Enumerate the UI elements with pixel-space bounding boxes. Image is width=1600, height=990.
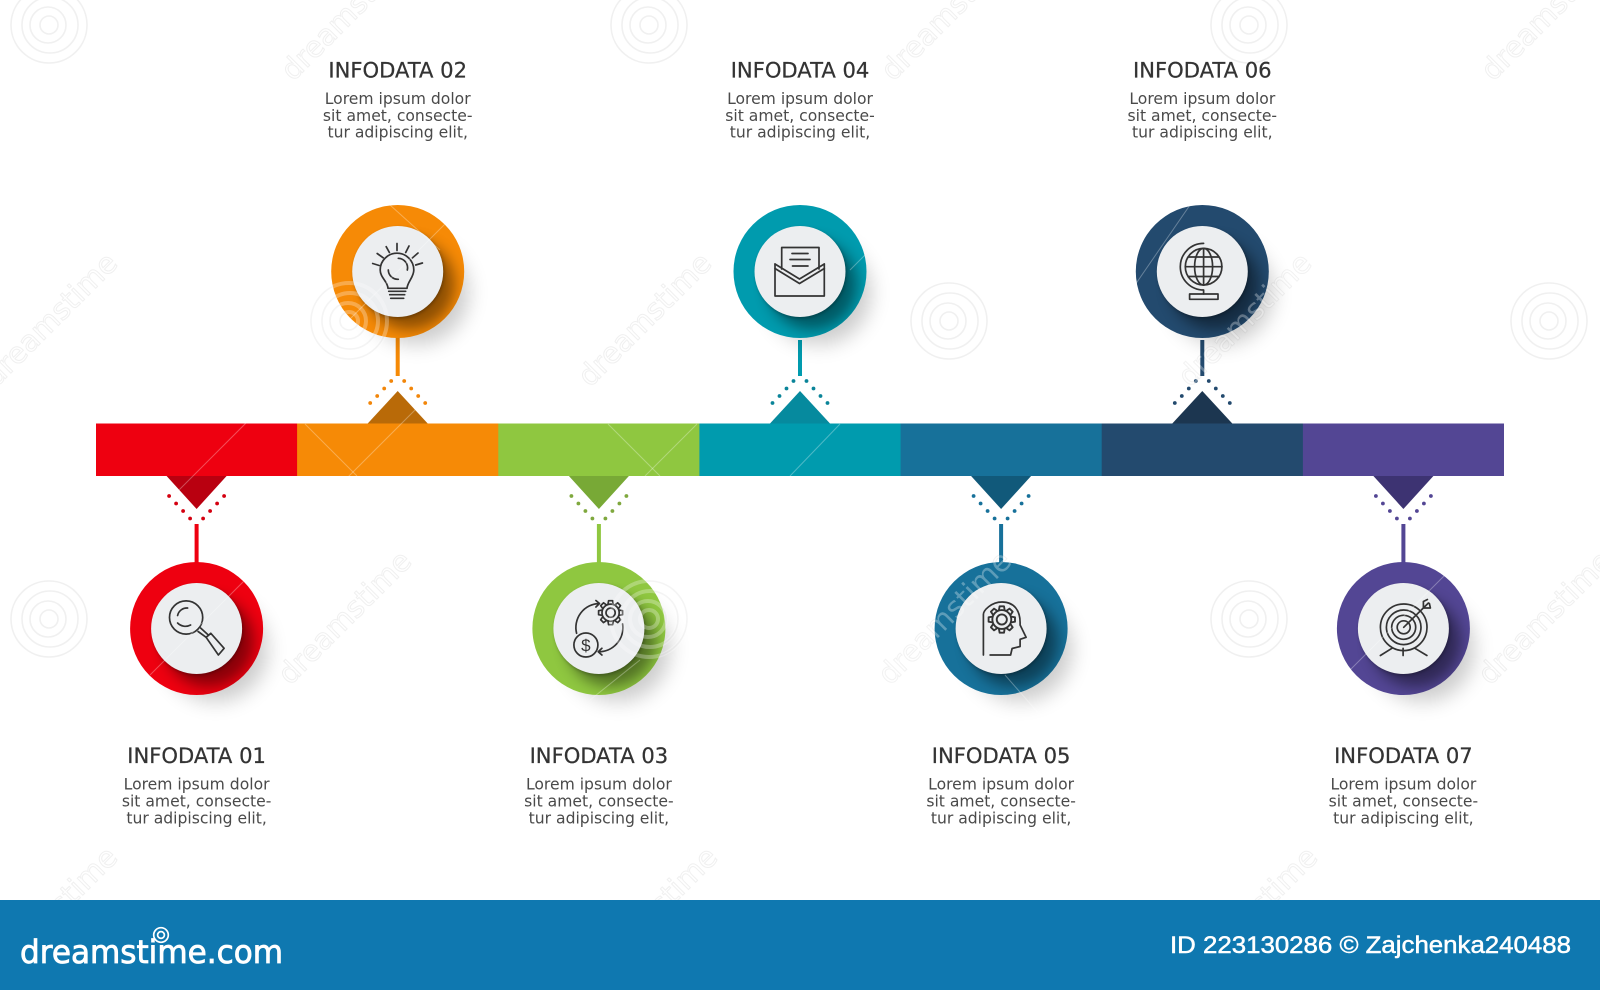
label 04: sit amet, consecte- <box>725 107 875 125</box>
connector: pointer, dots and stem <box>167 476 227 564</box>
label 03: Lorem ipsum dolor <box>526 776 672 794</box>
step 06 <box>1128 57 1277 424</box>
label 02 <box>323 57 472 142</box>
label 05: sit amet, consecte- <box>926 792 1076 810</box>
segment 1 <box>96 424 298 476</box>
footer logo: dreamstime.com <box>20 933 283 971</box>
label 04: Lorem ipsum dolor <box>727 90 874 108</box>
image id and credit: ID 223130286 © Zajchenka240488 <box>1170 932 1571 959</box>
step 02 <box>323 57 472 424</box>
label 06: INFODATA 06 <box>1133 57 1272 82</box>
circle badge with target icon <box>1337 562 1474 702</box>
label 06: sit amet, consecte- <box>1128 107 1277 125</box>
label 07: tur adipiscing elit, <box>1333 809 1474 827</box>
connector: pointer, dots and stem <box>569 476 629 564</box>
label 05: tur adipiscing elit, <box>931 809 1071 827</box>
connector: pointer, dots and stem <box>971 476 1031 564</box>
background watermark: dreamstime <box>571 246 718 393</box>
label 02: Lorem ipsum dolor <box>325 90 471 108</box>
label 04: INFODATA 04 <box>731 57 869 82</box>
label 02: sit amet, consecte- <box>323 107 472 125</box>
segment 3 <box>498 424 700 476</box>
circle badge with magnifier icon <box>130 562 268 702</box>
label 06: Lorem ipsum dolor <box>1129 90 1276 108</box>
label 01: sit amet, consecte- <box>122 792 271 810</box>
label 04: tur adipiscing elit, <box>730 124 870 142</box>
label 01: tur adipiscing elit, <box>126 809 267 827</box>
label 01 <box>122 743 271 827</box>
segment 7 <box>1303 424 1504 476</box>
label 07: INFODATA 07 <box>1334 743 1473 768</box>
label 03: INFODATA 03 <box>530 743 668 768</box>
background watermark: dreamstime <box>271 544 418 691</box>
connector: pointer, dots and stem <box>770 340 830 424</box>
label 06 <box>1128 57 1277 142</box>
segment 6 <box>1102 424 1303 476</box>
watermark overlay <box>150 179 1445 715</box>
icon: globe <box>1180 243 1222 299</box>
label 03: tur adipiscing elit, <box>529 809 669 827</box>
label 02: tur adipiscing elit, <box>327 124 468 142</box>
label 07: sit amet, consecte- <box>1329 792 1478 810</box>
label 02: INFODATA 02 <box>328 57 467 82</box>
label 06: tur adipiscing elit, <box>1132 124 1273 142</box>
label 05: Lorem ipsum dolor <box>928 776 1075 794</box>
watermark overlay: dreamstime <box>871 544 1018 691</box>
circle badge with head and gear icon <box>935 562 1072 702</box>
segment 2 <box>297 424 499 476</box>
connector: pointer, dots and stem <box>368 336 428 424</box>
step 07 <box>1329 476 1478 827</box>
step 03 <box>524 476 674 827</box>
icon: envelope <box>775 248 824 296</box>
label 01: Lorem ipsum dolor <box>124 776 270 794</box>
icon: head with gear <box>983 602 1026 655</box>
connector: pointer, dots and stem <box>1373 476 1433 564</box>
background watermark: dreamstime <box>871 544 1018 691</box>
icon: magnifier <box>170 601 224 655</box>
icon: light bulb <box>373 244 422 298</box>
label 04 <box>725 57 875 142</box>
circle badge with envelope icon <box>734 205 871 344</box>
step 04 <box>725 57 875 424</box>
label 05 <box>926 743 1076 827</box>
connector: pointer, dots and stem <box>1172 340 1232 424</box>
segment 4 <box>699 424 901 476</box>
label 05: INFODATA 05 <box>932 743 1070 768</box>
step 01 <box>122 476 271 827</box>
label 03: sit amet, consecte- <box>524 792 674 810</box>
circle badge with gear and dollar icon <box>532 562 670 702</box>
background watermark: dreamstime <box>1177 840 1324 987</box>
circle badge with globe icon <box>1136 205 1273 344</box>
step 05 <box>926 476 1076 827</box>
circle badge with light bulb icon <box>331 205 469 344</box>
background watermark: dreamstime <box>1171 246 1318 393</box>
footer banner <box>0 900 1600 990</box>
background watermark: dreamstime <box>577 840 724 987</box>
label 01: INFODATA 01 <box>127 743 266 768</box>
label 03 <box>524 743 674 827</box>
label 07 <box>1329 743 1478 827</box>
icon: gear and dollar cycle: $ <box>581 636 591 655</box>
watermark overlay: dreamstime <box>1171 246 1318 393</box>
label 07: Lorem ipsum dolor <box>1330 776 1477 794</box>
logo spiral <box>154 928 168 942</box>
icon: target <box>1380 600 1430 656</box>
segment 5 <box>901 424 1102 476</box>
timeline bar <box>96 424 1504 476</box>
